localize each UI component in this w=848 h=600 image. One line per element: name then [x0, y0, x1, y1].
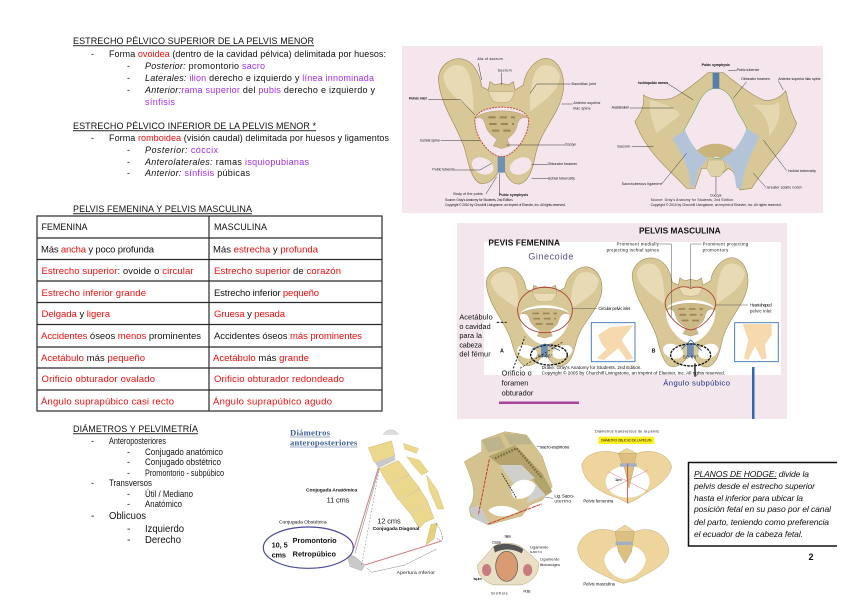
callout: hand female — [591, 323, 635, 362]
comparison table: Más ancha y poco profunda — [41, 244, 155, 256]
label: acetabulo — [459, 312, 507, 359]
labels: anterior pelvis: Obturator foramen — [548, 162, 577, 166]
illustration: oblique pelvis: Lig. Sacro- — [554, 493, 575, 498]
oval callout: promontorio retropubico: 10, 5 — [272, 541, 288, 550]
labels: anterior pelvis: Source: Gray's Anatomy for Students, 2nd Edition. — [445, 198, 513, 202]
comparison table: Gruesa y pesada — [214, 309, 286, 320]
text block: diametros list: - — [91, 510, 95, 522]
illustration: pelvic floor: Ligamento — [530, 544, 549, 549]
text block: diametros list: Promontorio - subpúbico — [145, 468, 224, 478]
comparison table: Acetábulo más grande — [213, 353, 309, 364]
text block: estrecho inferior — [91, 133, 390, 178]
labels: anterior pelvis: Sacrum — [498, 69, 512, 73]
illustration: pelvic floor: sacro — [530, 549, 542, 554]
labels: caudal pelvis: Sacrum — [617, 144, 630, 148]
panel: pelvis femenina anatomy — [402, 46, 823, 213]
text block: estrecho inferior: Posterior: cóccix — [145, 145, 218, 155]
labels: caudal pelvis: Coccyx — [710, 194, 722, 198]
text block: diametros list: - — [127, 534, 131, 546]
labels: anterior pelvis: Ischial spine — [420, 138, 440, 142]
comparison table: Estrecho superior de corazón — [214, 266, 341, 277]
labels: anterior pelvis — [409, 57, 601, 207]
text block: estrecho superior: - — [127, 61, 130, 71]
callout: planos de hodge: del parto, teniendo como preferencia — [694, 517, 829, 527]
accent line: purple — [499, 402, 579, 404]
labels: caudal pelvis: Ischial tuberosity — [788, 169, 816, 173]
labels: caudal pelvis: Anterior superior iliac spine — [778, 77, 821, 81]
text block: diametros list: Anteroposteriores — [109, 436, 166, 446]
text block: diametros list: - — [127, 523, 131, 535]
comparison table: Ángulo suprapúbico agudo — [213, 396, 332, 408]
labels: diameters: 12 cms — [377, 517, 401, 526]
caption: source: Copyright © 2005 by Churchill Livingstone, an imprint of Elsevier, Inc. All rights reserved. — [542, 370, 725, 376]
page number: 2 — [808, 552, 814, 562]
text block: diametros list: Conjugado anatómico — [145, 447, 223, 457]
text block: diametros list: Conjugado obstétrico — [145, 457, 221, 467]
text block: estrecho inferior: Forma romboidea (visión caudal) delimitada por huesos y ligamentos — [109, 133, 390, 143]
labels: anterior pelvis: Copyright © 2010 by Churchill Livingstone, an imprint of Elsevier, Inc. All rights reserved. — [445, 203, 566, 207]
title: pelvis femenina: PEVIS FEMENINA — [488, 237, 560, 247]
label: acetabulo: del fémur — [459, 350, 491, 359]
oval callout: promontorio retropubico: Promontorio — [293, 536, 337, 545]
label: orificio obturador — [502, 337, 563, 397]
illustration: male pelvis top view — [578, 525, 669, 587]
sacrum and coccyx bones — [347, 430, 444, 571]
comparison table: Accidentes óseos más prominentes — [214, 331, 362, 342]
heading: pelvis femenina y masculina: PELVIS FEMENINA Y PELVIS MASCULINA — [73, 204, 252, 214]
text block: diametros list: - — [91, 436, 94, 446]
labels: caudal pelvis: Sacrotuberous ligament — [622, 182, 662, 186]
text block: diametros list: Izquierdo — [145, 523, 184, 535]
text block: estrecho superior: - — [127, 73, 130, 83]
labels: anterior pelvis: Pubic symphysis — [499, 193, 528, 197]
illustration: female pelvis top view: DIÁMETRO OBLICUO DE LA PELVIS — [601, 439, 652, 443]
heading: estrecho superior: ESTRECHO PÉLVICO SUPERIOR DE LA PELVIS MENOR — [73, 36, 314, 46]
labels: anterior pelvis: Ischial tuberosity — [548, 176, 575, 180]
illustration: male pelvis: Heart-shaped — [750, 302, 772, 307]
label: acetabulo: o cavidad — [459, 322, 491, 331]
labels: anterior pelvis: Coccyx — [565, 143, 576, 147]
illustrations: pelvic planes — [464, 430, 672, 595]
illustration: pelvic floor — [473, 533, 561, 595]
labels: caudal pelvis: Greater sciatic notch — [767, 185, 802, 189]
illustration: female pelvis top view: Diámetros transversos de la pelvis — [595, 430, 659, 434]
diagram: diametros anteroposteriores — [263, 428, 444, 576]
heading: estrecho inferior: ESTRECHO PÉLVICO INFERIOR DE LA PELVIS MENOR * — [73, 121, 316, 131]
illustration: male pelvis: projecting ischial spines — [607, 247, 659, 252]
caption: source: Drake: Gray's Anatomy for Students, 2nd Edition. — [542, 365, 642, 370]
callout: planos de hodge: hasta el inferior para ubicar la — [694, 493, 803, 503]
labels: caudal pelvis: Obturator foramen — [741, 77, 770, 81]
illustration: female pelvis top view: Pelvis femenina — [583, 498, 614, 503]
text block: estrecho superior: - — [91, 49, 94, 59]
text block: diametros list: Transversos — [109, 478, 152, 488]
comparison table: Estrecho superior: ovoide o circular — [42, 266, 194, 277]
text block: estrecho inferior: Anterolaterales: ramas isquiopubianas — [144, 157, 310, 167]
label: orificio obturador: foramen — [502, 379, 528, 388]
illustration: oblique pelvis: uterino — [554, 498, 571, 503]
illustration: female pelvis: 90-60° — [538, 353, 553, 358]
label: acetabulo: cabeza — [459, 340, 483, 349]
illustration: oblique pelvis: sacro-espinoso — [540, 445, 570, 450]
illustration: male pelvis: pelvic inlet — [750, 308, 772, 313]
caption: source — [542, 365, 725, 376]
text block: estrecho inferior: - — [127, 157, 130, 167]
labels: diameters: Conjugada Anatómica — [306, 487, 358, 493]
illustration: pelvic floor: Pubis — [523, 589, 531, 594]
labels: diameters — [279, 487, 435, 576]
labels: caudal pelvis: Pubic symphysis — [702, 63, 730, 67]
illustration: male pelvis top view: Pelvis masculina — [583, 582, 616, 587]
callout: hand male — [735, 323, 778, 362]
comparison table — [37, 216, 382, 411]
illustration: female pelvis top view: 11 cm — [615, 478, 622, 482]
labels: anterior pelvis: Pubic tubercle — [432, 168, 455, 172]
label: orificio obturador: obturador — [502, 388, 534, 397]
illustration: male pelvis: promontory — [703, 247, 729, 252]
text block: diametros list: Oblicuos — [109, 510, 146, 522]
comparison table: MASCULINA — [214, 222, 267, 232]
text block: diametros list: Derecho — [145, 534, 181, 546]
oval callout: promontorio retropubico: cms — [272, 550, 286, 559]
callout: planos de hodge — [688, 462, 837, 546]
labels: caudal pelvis: Copyright © 2010 by Churchill Livingstone, an imprint of Elsevier, Inc. All rights reserved. — [651, 203, 782, 207]
text block: estrecho inferior: - — [127, 168, 130, 178]
text block: estrecho superior: Posterior: promontorio sacro — [145, 61, 265, 71]
comparison table: Acetábulo más pequeño — [41, 353, 145, 364]
text block: estrecho superior: Forma ovoidea (dentro de la cavidad pélvica) delimitada por huesos: — [109, 49, 386, 59]
illustration: female pelvis top view — [582, 430, 672, 503]
text block: estrecho superior: Anterior:rama superior del pubis derecho e izquierdo y — [144, 85, 376, 95]
oval callout: promontorio retropubico: Retropúbico — [293, 549, 336, 558]
diagram title — [290, 428, 358, 448]
text block: estrecho inferior: - — [91, 133, 94, 143]
illustration: male pelvis — [607, 241, 772, 367]
illustration: pelvic floor: Sacro — [504, 533, 512, 538]
illustration: female pelvis — [486, 267, 631, 366]
labels: anterior pelvis: Body of the pubis — [453, 192, 483, 196]
illustration: oblique pelvis — [464, 432, 575, 525]
text block: diametros list: - — [127, 468, 130, 478]
label: ginecoide: Ginecoide — [528, 251, 573, 261]
label: acetabulo: Acetábulo — [459, 312, 493, 321]
illustration: caudal pelvis — [630, 71, 797, 194]
label: angulo subpubico — [663, 363, 730, 388]
text block: estrecho inferior: Anterior: sínfisis púbicas — [144, 168, 250, 178]
comparison table: Estrecho inferior pequeño — [214, 288, 319, 299]
illustration: male pelvis: 50-60° — [683, 355, 699, 360]
text block: estrecho inferior: - — [127, 145, 130, 155]
callout: planos de hodge: PLANOS DE HODGE: divide la — [694, 469, 809, 479]
labels: diameters: Apertura Inferior — [397, 570, 435, 576]
labels: diameters: Conjugada Obstétrica — [279, 520, 327, 526]
text block: diametros list: - — [127, 489, 130, 499]
text block: diametros list: - — [127, 457, 130, 467]
comparison table: Ángulo suprapúbico casi recto — [41, 396, 174, 408]
callout: planos de hodge: el ecuador de la cabeza fetal. — [694, 529, 803, 539]
text block: estrecho superior: Laterales: ilion derecho e izquierdo y línea innominada — [145, 73, 374, 83]
labels: caudal pelvis: Acetabulum — [612, 106, 629, 110]
callout: planos de hodge: posición fetal en su paso por el canal — [693, 504, 832, 514]
labels: diameters: 11 cms — [327, 496, 350, 505]
callout: planos de hodge: pelvis desde el estrecho superior — [693, 481, 816, 491]
illustration: male pelvis: Prominent projecting — [703, 241, 749, 246]
comparison table: Más estrecha y profunda — [213, 244, 319, 256]
text block: estrecho superior — [91, 49, 386, 107]
accent line: blue — [752, 367, 754, 419]
text block: diametros list: - — [91, 478, 94, 488]
illustration: male pelvis: B — [652, 349, 656, 355]
label: acetabulo: para la — [459, 331, 483, 340]
illustration: pelvic floor: Isquion — [473, 576, 482, 581]
comparison table: Delgada y ligera — [42, 309, 111, 320]
illustration: male pelvis: Prominent medially — [617, 241, 660, 246]
oval callout: promontorio retropubico — [263, 527, 353, 568]
comparison table: Accidentes óseos menos prominentes — [41, 331, 201, 342]
illustration: pelvic floor: Sínfisis — [491, 590, 508, 595]
comparison table: Estrecho inferior grande — [42, 288, 146, 299]
illustration: female pelvis: A — [500, 349, 504, 355]
text block: diametros list: - — [127, 499, 130, 509]
labels: caudal pelvis — [612, 63, 821, 207]
labels: anterior pelvis: iliac spine — [573, 106, 591, 110]
title: pelvis masculina: PELVIS MASCULINA — [639, 225, 721, 235]
heading: diametros: DIÁMETROS Y PELVIMETRÍA — [73, 424, 198, 434]
labels: anterior pelvis: Pelvic inlet — [409, 96, 427, 100]
text block: estrecho superior: - — [127, 85, 130, 95]
illustration: pelvic floor: Cóccix — [492, 539, 501, 544]
labels: anterior pelvis: Ala of sacrum — [477, 57, 503, 61]
text block: diametros list: Útil / Mediano — [145, 489, 193, 499]
illustration: female pelvis: Circular pelvic inlet — [598, 306, 631, 311]
labels: anterior pelvis: Sacroiliac joint — [572, 82, 596, 86]
illustration: pelvic floor: iliococcígeo — [540, 562, 561, 567]
labels: anterior pelvis: Anterior superior — [573, 101, 601, 105]
labels: caudal pelvis: Source: Gray's Anatomy for Students, 2nd Edition. — [651, 198, 734, 202]
comparison table: Orificio obturador redondeado — [214, 374, 344, 385]
diagram title: anteroposteriores — [290, 438, 358, 448]
label: orificio obturador: Orificio o — [502, 369, 532, 378]
comparison table: FEMENINA — [42, 222, 88, 232]
text block: diametros list: - — [127, 447, 130, 457]
illustration: anterior pelvis — [428, 58, 573, 194]
text block: estrecho superior: sínfisis — [145, 97, 176, 107]
illustration: pelvic floor: Ligamento — [540, 557, 560, 562]
label: angulo subpubico: Ángulo subpúbico — [663, 379, 730, 388]
labels: caudal pelvis: Pubic tubercle — [737, 68, 759, 72]
diameter lines — [354, 468, 442, 572]
text block: diametros list — [91, 436, 224, 546]
labels: caudal pelvis: Ischiopubic ramus — [638, 81, 668, 85]
panel: pelvis femenina vs masculina — [457, 223, 787, 419]
text block: diametros list: Anatómico — [145, 499, 182, 509]
diagram title: Diámetros — [290, 428, 331, 438]
labels: diameters: Conjugada Diagonal — [373, 526, 420, 532]
comparison table: Orificio obturador ovalado — [42, 374, 155, 385]
